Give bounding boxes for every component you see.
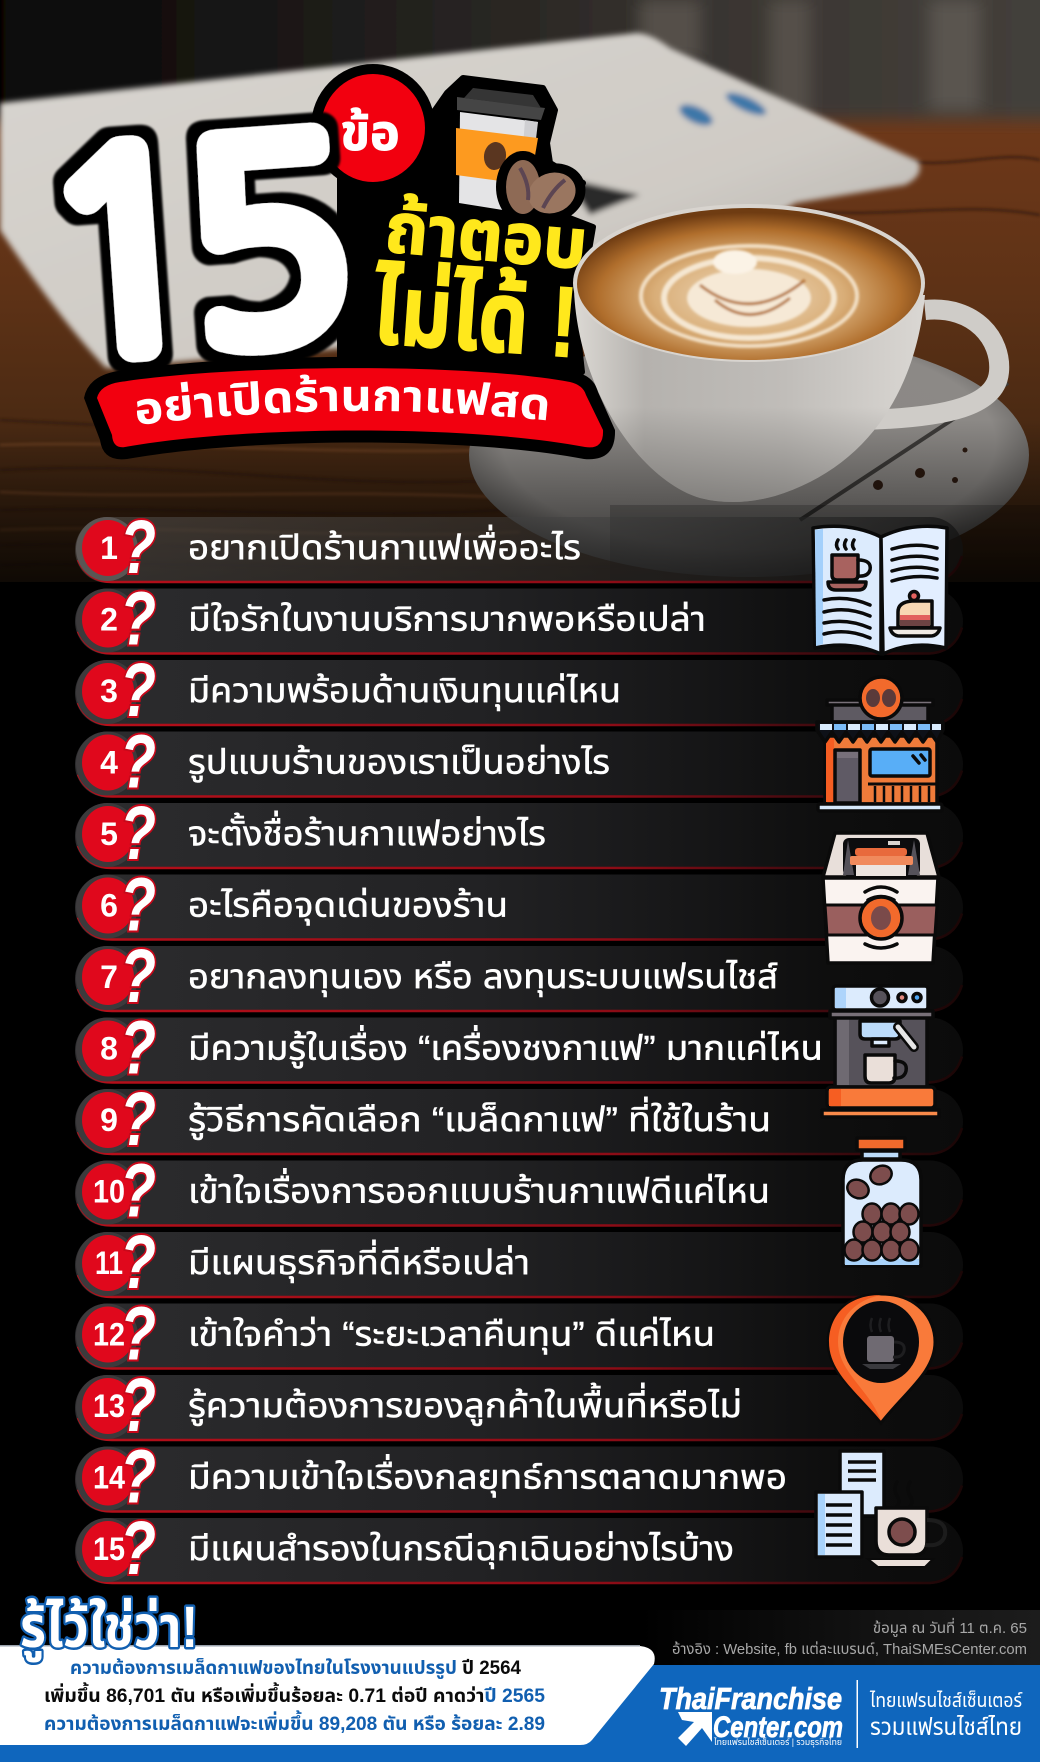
row 11: มีแผนธุรกิจที่ดีหรือเปล่า [188, 1239, 530, 1283]
row 10: เข้าใจเรื่องการออกแบบร้านกาแฟดีแค่ไหน [188, 1168, 770, 1210]
icon: espresso machine [822, 986, 939, 1117]
row 2: ? [120, 576, 156, 662]
icon: documents and coffee cup [816, 1451, 945, 1567]
row 4 [75, 720, 963, 804]
row 8: ? [120, 1006, 156, 1090]
coffee cup over title [573, 204, 999, 502]
panel top edge [0, 1645, 640, 1646]
row 6: ? [120, 862, 156, 948]
circle badge: ข้อ: ข้อ [340, 105, 400, 161]
row 15: มีแผนสำรองในกรณีฉุกเฉินอย่างไรบ้าง [188, 1530, 734, 1569]
row 7: อยากลงทุนเอง หรือ ลงทุนระบบแฟรนไชส์ [188, 958, 778, 997]
row 5: จะตั้งชื่อร้านกาแฟอย่างไร [188, 810, 546, 853]
row 9: ? [120, 1077, 156, 1162]
saucer [469, 333, 1029, 577]
cup handle [860, 310, 999, 420]
bottom fade [0, 420, 1040, 582]
row 14 [75, 1434, 963, 1520]
row 2 [75, 576, 963, 662]
heading: รู้ไว้ใช่ว่า!: รู้ไว้ใช่ว่า! [20, 1595, 198, 1663]
row 11 [75, 1220, 963, 1305]
row 11: ? [120, 1220, 156, 1305]
red banner: อย่าเปิดร้านกาแฟสด [84, 356, 615, 460]
wood grain [0, 157, 1040, 568]
row 14: 14 [93, 1460, 125, 1496]
row 6 [75, 862, 963, 948]
row 8: มีความรู้ในเรื่อง “เครื่องชงกาแฟ” มากแค่ไหน [188, 1024, 823, 1068]
fact text [44, 1656, 545, 1735]
cup shading [574, 290, 925, 502]
row 1: ? [120, 505, 156, 590]
row 8: 8 [100, 1030, 118, 1066]
row 2: มีใจรักในงานบริการมากพอหรือเปล่า [188, 600, 706, 638]
icon: coffee beans [496, 151, 594, 232]
tagline [869, 1690, 1023, 1741]
row 12: 12 [93, 1316, 125, 1352]
icon: coffee shop [817, 677, 943, 811]
row 12 [75, 1292, 963, 1376]
row 7 [75, 934, 963, 1019]
row 4: รูปแบบร้านของเราเป็นอย่างไร [188, 744, 610, 782]
source note: อ้างอิง : Website, fb แต่ละแบรนด์, ThaiSMEsCenter.com [672, 1640, 1027, 1658]
row 5: 5 [100, 816, 118, 852]
cup body [574, 290, 925, 502]
footer [0, 1595, 1040, 1762]
row 14: ? [120, 1434, 156, 1520]
row 9 [75, 1077, 963, 1162]
row 15: ? [120, 1506, 156, 1591]
source band [640, 1610, 1040, 1670]
big number 15: 1 [34, 114, 215, 393]
row 15: 15 [93, 1531, 125, 1567]
heading: ไม่ได้ !: ไม่ได้ ! [370, 253, 581, 379]
big number 15 [34, 104, 361, 393]
blurred newspaper [0, 33, 920, 368]
tagline: ไทยแฟรนไชส์เซ็นเตอร์ [869, 1690, 1023, 1712]
logo: ThaiFranchise Center.com: ไทยแฟรนไชส์เซ็นเตอร์ | รวมธุรกิจไทย [713, 1737, 842, 1747]
row 13: ? [120, 1363, 156, 1448]
list of 15 questions [75, 505, 963, 1591]
row 1 [75, 505, 963, 590]
spoon [800, 383, 1008, 520]
white fact panel [0, 1646, 655, 1745]
tagline: รวมแฟรนไชส์ไทย [870, 1714, 1022, 1741]
row 3: มีความพร้อมด้านเงินทุนแค่ไหน [188, 672, 621, 711]
row 1: อยากเปิดร้านกาแฟเพื่ออะไร [188, 524, 581, 567]
row 9: 9 [100, 1102, 118, 1138]
source note: ข้อมูล ณ วันที่ 11 ต.ค. 65 [873, 1617, 1027, 1637]
logo: ThaiFranchise Center.com [659, 1681, 843, 1747]
icon: arrow [678, 1712, 712, 1746]
icon: map pin with coffee [828, 1294, 935, 1423]
row 13: 13 [93, 1388, 125, 1424]
logo: ThaiFranchise Center.com: ThaiFranchise [659, 1681, 842, 1716]
row 3 [75, 648, 963, 733]
big number 15: 5 [176, 104, 361, 383]
row 8 [75, 1006, 963, 1090]
row 14: มีความเข้าใจเรื่องกลยุทธ์การตลาดมากพอ [188, 1454, 787, 1498]
crumbs [873, 448, 968, 490]
heading: ถ้าตอบ: ถ้าตอบ [382, 188, 590, 284]
row 11: 11 [95, 1245, 123, 1281]
row 13 [75, 1363, 963, 1448]
row 2: 2 [100, 602, 118, 638]
row 6: 6 [100, 888, 118, 924]
circle badge: ข้อ [311, 64, 435, 190]
row 13: รู้ความต้องการของลูกค้าในพื้นที่หรือไม่ [188, 1382, 742, 1426]
blurred dark backdrop [0, 0, 1040, 120]
row 7: 7 [100, 959, 118, 995]
fact text: ความต้องการเมล็ดกาแฟจะเพิ่มขึ้น 89,208 ตัน หรือ ร้อยละ 2.89 [44, 1710, 545, 1735]
row 15 [75, 1506, 963, 1591]
blue footer band [0, 1665, 1040, 1762]
fact text: ความต้องการเมล็ดกาแฟของไทยในโรงงานแปรรูป ปี 2564 [70, 1656, 521, 1679]
row 3: ? [120, 648, 156, 733]
row 5 [75, 791, 963, 876]
black backing shape [340, 78, 593, 375]
icon: takeaway cup box [823, 833, 939, 963]
row 1: 1 [100, 530, 118, 566]
row 10: ? [120, 1148, 156, 1234]
icon: open menu [813, 526, 947, 654]
row 3: 3 [100, 673, 118, 709]
row 7: ? [120, 934, 156, 1019]
row 4: ? [120, 720, 156, 804]
row 9: รู้วิธีการคัดเลือก “เมล็ดกาแฟ” ที่ใช้ในร้าน [188, 1096, 771, 1140]
red banner: อย่าเปิดร้านกาแฟสด: อย่าเปิดร้านกาแฟสด [136, 374, 548, 424]
row 5: ? [120, 791, 156, 876]
fact text: เพิ่มขึ้น 86,701 ตัน หรือเพิ่มขึ้นร้อยละ 0.71 ต่อปี คาดว่า ปี 2565 [44, 1682, 545, 1707]
row 4: 4 [100, 744, 118, 780]
logo divider [856, 1680, 858, 1748]
source note [672, 1617, 1027, 1658]
row 12: ? [120, 1292, 156, 1376]
logo: ThaiFranchise Center.com: Center.com [713, 1711, 843, 1744]
row 12: เข้าใจคำว่า “ระยะเวลาคืนทุน” ดีแค่ไหน [188, 1316, 715, 1354]
latte art [641, 246, 857, 346]
coffee surface [573, 204, 925, 362]
row 10 [75, 1148, 963, 1234]
icon: takeaway coffee cup with beans [456, 88, 545, 212]
title lockup [34, 64, 615, 460]
row 10: 10 [93, 1174, 125, 1210]
icon: jar of coffee beans [843, 1138, 921, 1266]
row 6: อะไรคือจุดเด่นของร้าน [188, 886, 508, 926]
background photo: coffee cup on wooden table [0, 0, 1040, 582]
